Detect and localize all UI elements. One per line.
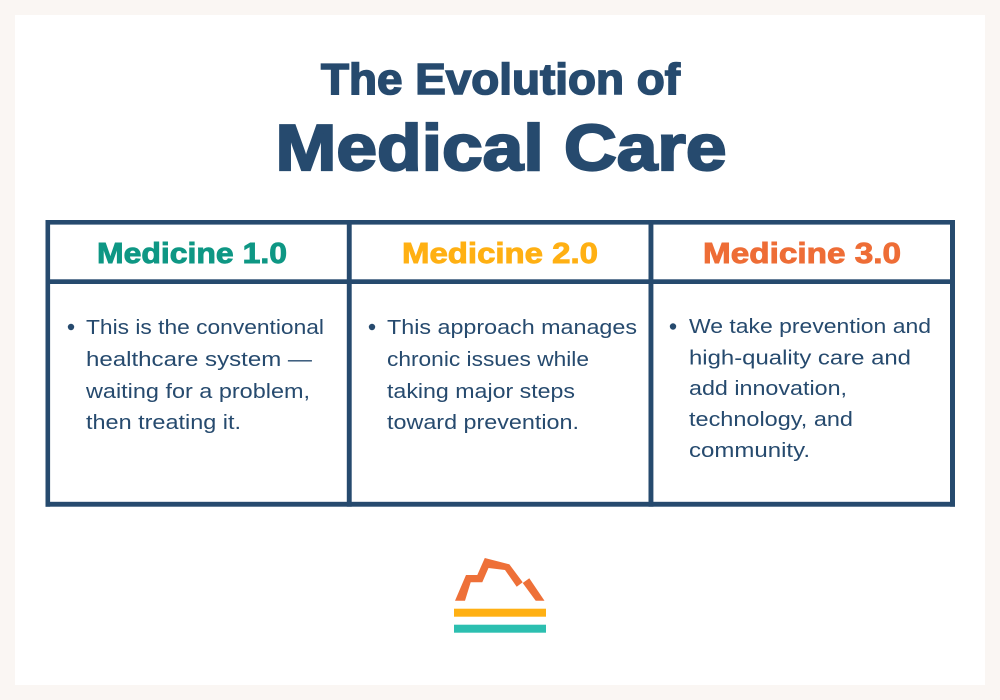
column 3 text: high-quality care and xyxy=(689,348,911,370)
title xyxy=(276,55,726,184)
icon: mountain logo xyxy=(454,558,546,633)
title: Medical Care xyxy=(276,111,726,184)
column 1 text xyxy=(68,317,324,434)
column 2 text: toward prevention. xyxy=(387,412,579,434)
column 2 text: This approach manages xyxy=(387,317,637,339)
column heading: Medicine 2.0: Medicine 2.0 xyxy=(402,238,598,270)
column 3 text: add innovation, xyxy=(689,378,847,400)
column 2 text: taking major steps xyxy=(387,381,575,403)
comparison table grid xyxy=(46,220,955,507)
column 1 text: waiting for a problem, xyxy=(85,381,310,403)
column heading: Medicine 1.0: Medicine 1.0 xyxy=(97,238,287,270)
column 3 text: We take prevention and xyxy=(689,316,931,338)
column 3 text xyxy=(670,316,931,462)
column 3 text: technology, and xyxy=(689,409,853,431)
title: The Evolution of xyxy=(321,55,680,104)
column 1 text: This is the conventional xyxy=(86,317,324,339)
column 2 text xyxy=(369,317,637,434)
column 1 text: then treating it. xyxy=(86,412,241,434)
column 3 text: community. xyxy=(689,440,810,462)
column 1 text: healthcare system — xyxy=(86,349,312,371)
column 2 text: chronic issues while xyxy=(387,349,589,371)
column heading: Medicine 3.0: Medicine 3.0 xyxy=(703,238,901,270)
